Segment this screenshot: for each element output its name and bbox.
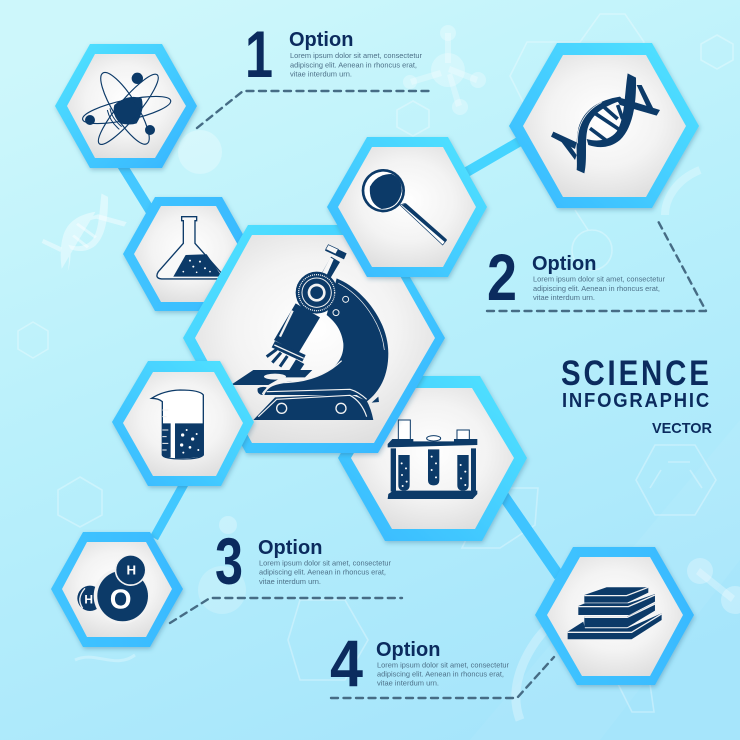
callout 4 xyxy=(330,626,554,700)
text block: option 2: Lorem ipsum dolor sit amet, consectetur xyxy=(533,274,665,284)
panel: DNA hexagon xyxy=(509,43,699,208)
connector: magnifier to DNA xyxy=(465,140,522,173)
icon: atom xyxy=(81,67,173,150)
heading: option 2: Option xyxy=(532,253,596,275)
panel: magnifier hexagon xyxy=(327,137,487,277)
number 4: 4 xyxy=(330,626,363,700)
connector: atom to flask xyxy=(120,162,151,212)
dashed leader 1 xyxy=(197,91,433,128)
connector: beaker to water xyxy=(154,484,184,538)
callout 1 xyxy=(197,17,433,128)
text block: option 4: Lorem ipsum dolor sit amet, consectetur xyxy=(377,660,509,670)
faint DNA motif xyxy=(42,194,127,272)
text block: option 2: adipiscing elit. Aenean in rhoncus erat, xyxy=(533,284,660,293)
connector: test tubes to books xyxy=(503,495,559,576)
title xyxy=(561,354,712,437)
icon: magnifying glass xyxy=(362,169,447,245)
icon: H2O molecule: H xyxy=(84,592,93,606)
panel: atom hexagon xyxy=(55,44,197,168)
icon: beaker xyxy=(152,390,203,459)
icon: microscope xyxy=(232,245,388,420)
panel: water molecule hexagon xyxy=(51,532,183,647)
icon: H2O molecule: O xyxy=(110,583,132,614)
icon: H2O molecule: H xyxy=(127,562,136,577)
panel: flask hexagon xyxy=(123,197,254,311)
text block: option 1: adipiscing elit. Aenean in rhoncus erat, xyxy=(290,60,417,70)
heading: option 4: Option xyxy=(376,639,440,661)
icon: H2O molecule xyxy=(77,554,150,624)
icon: test tube rack xyxy=(388,420,477,499)
panel: beaker hexagon xyxy=(112,361,254,486)
heading: option 3: Option xyxy=(258,537,322,559)
icon: DNA helix xyxy=(551,73,660,173)
text block: option 4: adipiscing elit. Aenean in rhoncus erat, xyxy=(377,670,504,678)
title: SCIENCE xyxy=(561,354,712,393)
text block: option 4: vitae interdum urn. xyxy=(377,678,439,688)
title: INFOGRAPHIC xyxy=(562,389,711,412)
panel: microscope hexagon xyxy=(183,225,445,453)
dashed leader 3 xyxy=(170,598,402,623)
text block: option 3: vitae interdum urn. xyxy=(259,577,321,586)
dashed leader 4 xyxy=(331,657,554,698)
dashed leader 2 xyxy=(487,221,706,311)
icon: stack of books xyxy=(568,587,662,639)
callout 2 xyxy=(487,221,706,314)
panel: test tubes hexagon xyxy=(338,376,527,541)
panel: books hexagon xyxy=(535,547,694,685)
title: VECTOR xyxy=(652,420,712,437)
text block: option 2: vitae interdum urn. xyxy=(533,293,595,302)
number 3: 3 xyxy=(215,524,243,598)
text block: option 1: vitae interdum urn. xyxy=(290,70,352,78)
number 1: 1 xyxy=(245,17,273,91)
text block: option 3: Lorem ipsum dolor sit amet, consectetur xyxy=(259,558,391,568)
heading: option 1: Option xyxy=(289,29,353,51)
callout 3 xyxy=(170,524,402,623)
text block: option 1: Lorem ipsum dolor sit amet, consectetur xyxy=(290,51,422,60)
text block: option 3: adipiscing elit. Aenean in rhoncus erat, xyxy=(259,568,386,576)
number 2: 2 xyxy=(487,240,517,314)
icon: flask xyxy=(157,217,222,279)
